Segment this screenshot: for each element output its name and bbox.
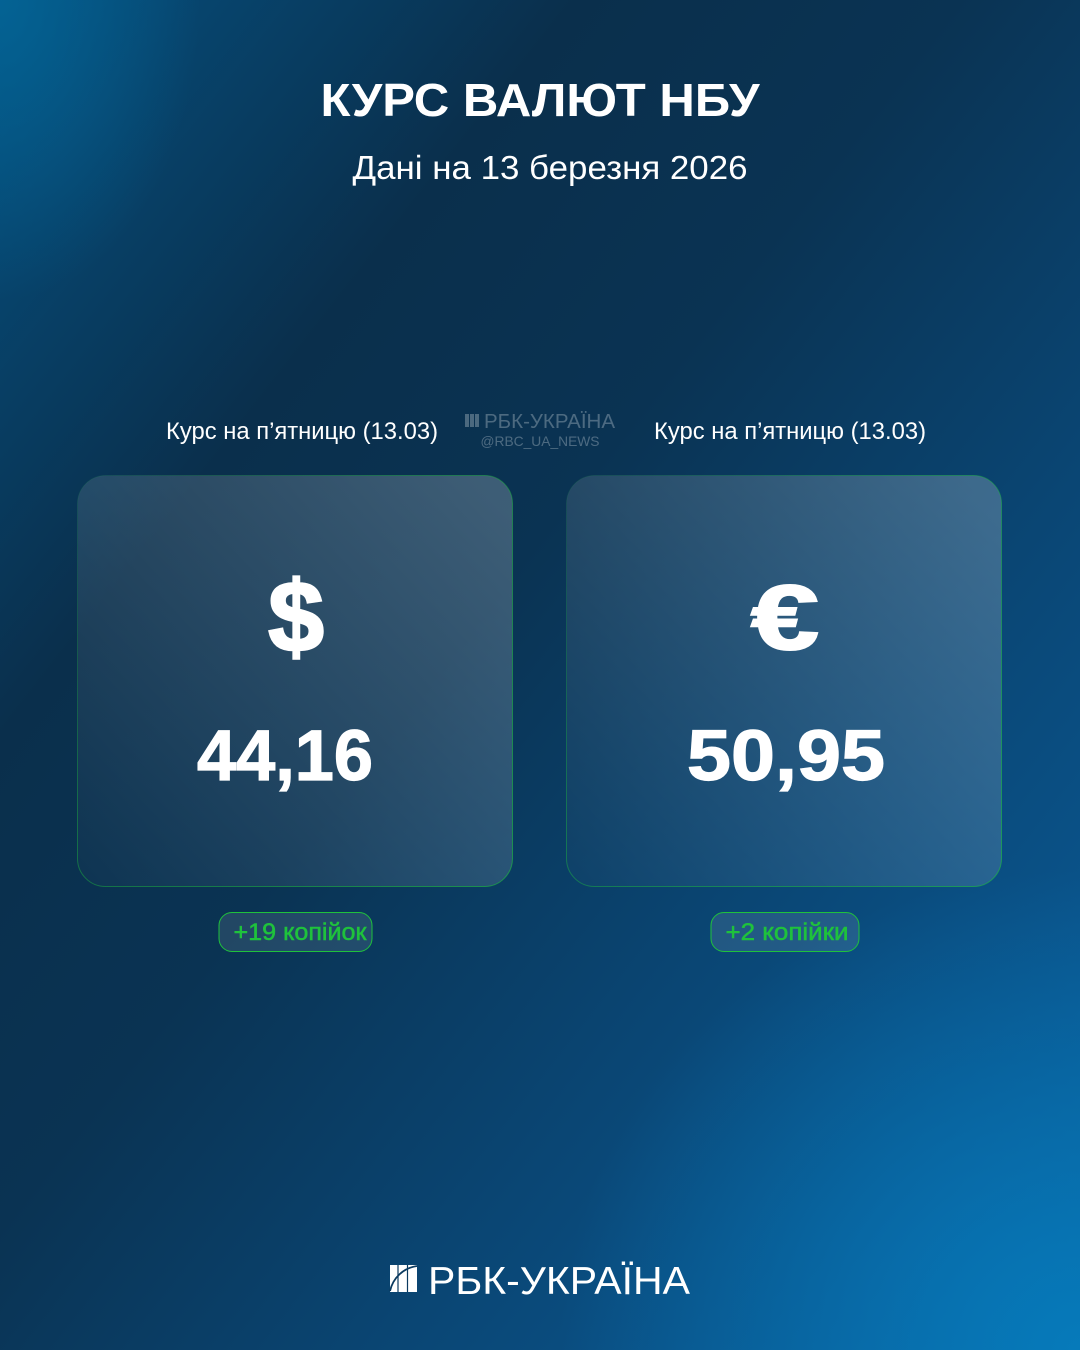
left column label: Курс на п’ятницю (13.03) (166, 418, 438, 445)
icon: logo mark (390, 1265, 417, 1292)
badge: USD change: +19 копійок (234, 919, 367, 946)
EUR rate: 50,95 (687, 717, 885, 796)
right column label: Курс на п’ятницю (13.03) (654, 418, 926, 445)
watermark: @RBC_UA_NEWS (480, 433, 600, 449)
logo: РБК-Україна (390, 1260, 690, 1303)
badge: USD change (219, 912, 372, 952)
logo wordmark: РБК-УКРАЇНА (428, 1260, 690, 1303)
watermark (465, 411, 616, 449)
watermark: РБК-УКРАЇНА (484, 411, 616, 433)
badge: EUR change (711, 912, 859, 952)
subtitle: date: Дані на 13 березня 2026 (352, 149, 748, 186)
panel: EUR card (566, 476, 1002, 886)
panel: USD card (78, 476, 512, 886)
USD rate: 44,16 (197, 717, 373, 796)
badge: EUR change: +2 копійки (726, 919, 848, 946)
icon: euro sign: € (751, 567, 819, 669)
title: КУРС ВАЛЮТ НБУ (320, 74, 761, 126)
icon: dollar sign: $ (268, 561, 324, 673)
